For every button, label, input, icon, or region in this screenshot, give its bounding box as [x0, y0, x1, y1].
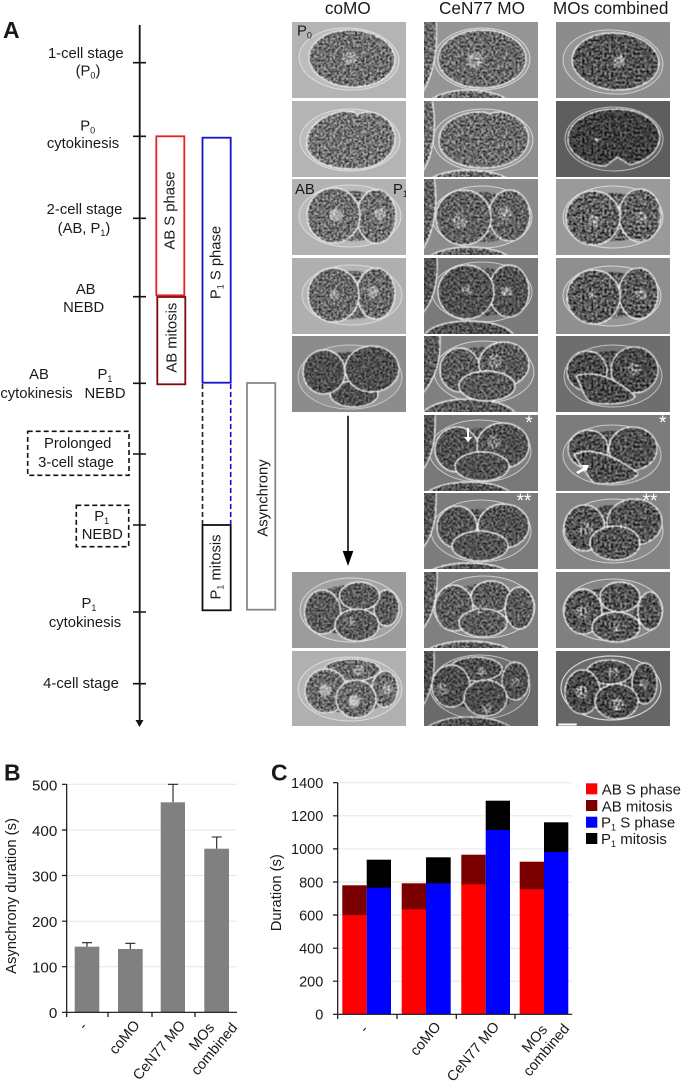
CeN77 frame 1: [424, 22, 538, 98]
x category labels: [76, 1018, 241, 1084]
x category labels: combined: [520, 1021, 573, 1080]
x category labels: MOs: [186, 1020, 218, 1054]
stage labels: ): [105, 221, 110, 237]
dashed box: prolonged 3-cell stage: Prolonged: [44, 436, 111, 452]
axes: [62, 784, 237, 1017]
x category labels: coMO: [106, 1018, 144, 1058]
stage labels: P: [82, 596, 91, 612]
y tick labels: 400: [32, 823, 57, 840]
legend: mitosis: [616, 831, 667, 848]
y axis title: Duration (s): [269, 854, 285, 931]
micrograph column: MOs combined: [556, 22, 670, 726]
group: no treatment: [342, 860, 391, 1014]
white arrow: [464, 428, 472, 442]
CeN77 frame 8: [424, 572, 538, 648]
box: AB mitosis: AB mitosis: [165, 303, 181, 373]
white arrow: [576, 465, 589, 474]
coMO frame 3: P: [393, 182, 403, 198]
white asterisk: *: [525, 413, 533, 434]
stage labels: 0: [90, 126, 95, 136]
stage labels: 0: [90, 70, 95, 80]
box: AB S phase: AB S phase: [163, 171, 179, 250]
dashed box: prolonged 3-cell stage: 3-cell stage: [38, 455, 114, 471]
legend: P: [601, 814, 611, 832]
box: P1 mitosis: mitosis: [209, 534, 225, 585]
CeN77 frame 7: [424, 491, 538, 569]
legend: AB S phase: [602, 782, 681, 798]
MOs frame 9: [556, 651, 670, 726]
MOs frame 7: [556, 491, 670, 569]
box: asynchrony: [247, 383, 275, 610]
white double asterisk: **: [517, 491, 532, 512]
group: CeN77 MO: [461, 801, 510, 1014]
stage labels: P: [98, 367, 107, 383]
stage labels: 1-cell stage: [48, 46, 124, 62]
stage labels: AB: [76, 282, 96, 298]
group: MOs combined: [520, 822, 568, 1014]
legend: [586, 782, 681, 849]
stage labels: (AB, P: [58, 221, 100, 237]
y tick labels: 500: [32, 778, 57, 795]
y tick labels: 300: [32, 868, 57, 886]
box: P1 mitosis: P: [209, 590, 225, 600]
dashed extension of P1 S phase: [202, 384, 231, 525]
stage labels: cytokinesis: [47, 136, 119, 152]
coMO frame 1: 0: [307, 30, 312, 40]
coMO frame 3: AB: [295, 182, 315, 198]
legend: AB mitosis: [602, 798, 673, 816]
stage labels: (P: [76, 64, 90, 80]
CeN77 frame 6: [424, 413, 538, 491]
panel label A: A: [3, 17, 20, 43]
white asterisk: *: [659, 413, 667, 434]
arrow between coMO frames: [343, 416, 353, 566]
box: P1 mitosis: [202, 525, 231, 610]
CeN77 frame 5: [424, 336, 538, 412]
stage labels: NEBD: [84, 386, 126, 402]
stage labels: [0, 46, 126, 692]
box: P1 S phase: S phase: [209, 226, 225, 284]
box: P1 mitosis: 1: [216, 585, 226, 590]
y tick labels: 100: [32, 960, 57, 976]
coMO frame 5: [292, 336, 406, 412]
MOs frame 6: [556, 413, 670, 491]
dashed box: P1 NEBD: [76, 505, 129, 547]
y tick labels: 600: [299, 908, 323, 924]
x category labels: -: [357, 1022, 372, 1036]
MOs frame 3: [556, 179, 670, 255]
box: asynchrony: Asynchrony: [255, 459, 271, 537]
coMO frame 3: 1: [403, 189, 408, 199]
y axis title: Asynchrony duration (s): [4, 818, 20, 974]
stage labels: cytokinesis: [0, 386, 73, 402]
MOs frame 2: [556, 101, 670, 177]
stage labels: ): [95, 64, 100, 80]
stage labels: AB: [29, 367, 49, 383]
dashed box: P1 NEBD: P: [94, 509, 104, 525]
MOs frame 5: [556, 336, 670, 412]
panel A: timeline: [0, 25, 275, 727]
axes: [333, 783, 572, 1019]
stage labels: 1: [100, 228, 105, 238]
stage labels: 1: [107, 374, 112, 384]
y tick labels: 800: [299, 876, 323, 892]
CeN77 frame 2: [424, 101, 538, 177]
y tick labels: 400: [299, 942, 323, 958]
y tick labels: [291, 776, 323, 1024]
CeN77 frame 9: [424, 651, 538, 726]
y tick labels: 0: [49, 1005, 57, 1022]
x category labels: combined: [188, 1020, 241, 1079]
y tick labels: 200: [299, 974, 323, 990]
white double asterisk: **: [643, 491, 658, 512]
coMO frame 4: [292, 258, 406, 334]
stage labels: P: [80, 119, 90, 135]
x category labels: [357, 1019, 573, 1085]
panel label C: C: [271, 760, 288, 786]
dashed box: P1 NEBD: 1: [104, 516, 109, 526]
y tick labels: 1000: [291, 842, 323, 858]
y tick labels: 1400: [291, 776, 323, 792]
stage labels: cytokinesis: [49, 615, 121, 631]
coMO frame 9: [292, 651, 406, 726]
gridlines: [338, 783, 572, 981]
gridlines: [67, 784, 237, 967]
dashed box: prolonged 3-cell stage: [28, 431, 129, 475]
box: P1 S phase: 1: [216, 284, 226, 289]
stacked bar chart C: phase durations: [269, 776, 573, 1085]
box: P1 S phase: [202, 138, 231, 383]
box: AB mitosis: [157, 297, 185, 384]
x category labels: -: [76, 1019, 91, 1033]
CeN77 frame 4: [424, 258, 538, 334]
x category labels: CeN77 MO: [444, 1019, 503, 1085]
coMO frame 3: [292, 179, 408, 255]
coMO frame 8: [292, 572, 406, 648]
micrograph column: CeN77 MO: [421, 20, 538, 753]
y tick labels: [32, 778, 57, 1022]
box: P1 S phase: P: [209, 289, 225, 299]
MOs frame 4: [556, 258, 670, 334]
x category labels: MOs: [519, 1022, 551, 1056]
box: AB S phase: [156, 136, 184, 295]
scale bar: [558, 724, 577, 726]
dashed box: P1 NEBD: NEBD: [82, 527, 123, 543]
coMO frame 1: [292, 22, 406, 98]
coMO frame 2: [292, 101, 406, 177]
legend: P: [601, 831, 611, 848]
bars: [75, 802, 229, 1012]
group: coMO: [402, 857, 451, 1014]
legend: S phase: [616, 814, 675, 832]
legend: 1: [611, 839, 616, 849]
coMO frame 1: P: [297, 24, 307, 40]
timeline axis with arrow: [133, 25, 146, 727]
stage labels: 2-cell stage: [47, 202, 122, 218]
stage labels: NEBD: [63, 300, 104, 316]
bar chart B: asynchrony duration: [4, 778, 241, 1084]
x category labels: CeN77 MO: [130, 1018, 189, 1084]
MOs frame 1: [556, 22, 670, 98]
stage labels: 4-cell stage: [43, 676, 119, 692]
panel label B: B: [4, 760, 21, 786]
micrograph column: coMO: [292, 22, 408, 726]
legend: 1: [611, 822, 616, 832]
stage labels: 1: [91, 603, 96, 613]
y tick labels: 1200: [291, 809, 323, 825]
column headings: [325, 0, 668, 18]
error bars: [82, 784, 222, 949]
x category labels: coMO: [407, 1019, 445, 1059]
CeN77 frame 3: [424, 179, 538, 255]
y tick labels: 0: [315, 1008, 323, 1024]
y tick labels: 200: [32, 914, 57, 931]
MOs frame 8: [556, 572, 670, 648]
